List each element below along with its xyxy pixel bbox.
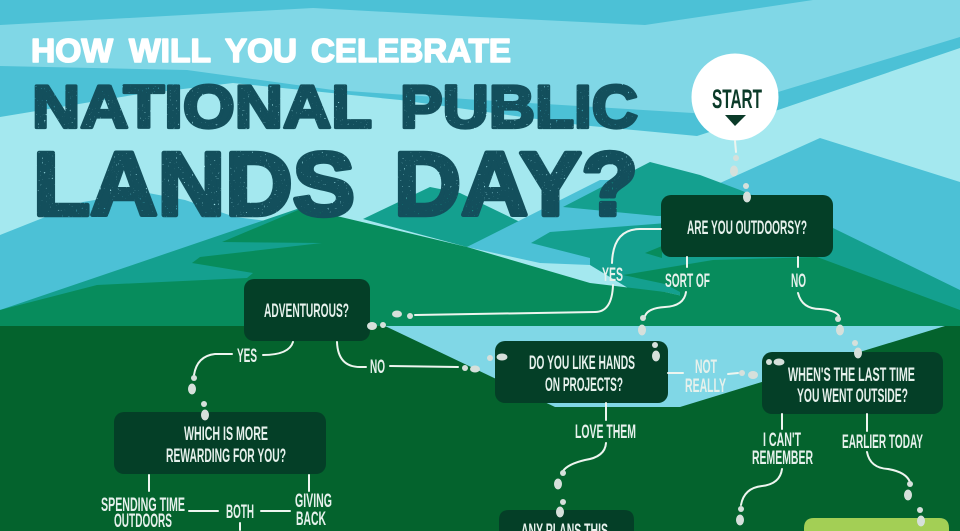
title line: lands day: DAY? — [394, 135, 638, 235]
trail: adventurous yes: YES — [237, 346, 257, 367]
title line: national public: PUBLIC — [400, 74, 638, 140]
trail: adventurous no — [337, 342, 480, 378]
title line: how will you celebrate: YOU — [225, 32, 297, 69]
trail: yes to adventurous — [392, 229, 661, 319]
question: adventurous: ADVENTUROUS? — [264, 301, 349, 322]
title line: national public: NATIONAL — [32, 74, 372, 140]
question: do you like hands on projects: ON PROJECTS? — [545, 375, 623, 396]
title line: lands day — [33, 135, 638, 235]
trail: no — [791, 257, 844, 336]
trail: earlier today — [842, 414, 923, 500]
trail: not really: NOT — [695, 357, 717, 378]
question: are you outdoorsy: ARE YOU OUTDOORSY? — [687, 218, 807, 239]
question: do you like hands on projects: DO YOU LIKE HANDS — [529, 353, 635, 374]
trail: start to first question — [730, 141, 739, 176]
question: adventurous — [244, 279, 370, 341]
trail: no: NO — [791, 271, 806, 292]
title line: how will you celebrate: HOW — [31, 32, 114, 69]
question: which is more rewarding: WHICH IS MORE — [184, 424, 268, 445]
question: do you like hands on projects — [487, 341, 668, 403]
title line: how will you celebrate — [31, 32, 511, 69]
branch: spending time outdoors, both, giving back: BOTH — [226, 502, 254, 523]
trail: i can't remember: I CAN'T — [763, 430, 801, 451]
question: any plans this — [499, 499, 634, 531]
title line: how will you celebrate: WILL — [129, 32, 211, 69]
branch: spending time outdoors, both, giving back — [101, 475, 332, 531]
trail: love them: LOVE THEM — [575, 422, 636, 443]
trail: not really: REALLY — [685, 376, 726, 397]
trail: sort of — [638, 257, 710, 336]
trail: i can't remember: REMEMBER — [752, 448, 813, 469]
question: are you outdoorsy — [661, 183, 833, 257]
branch: spending time outdoors, both, giving back: SPENDING TIME — [101, 495, 185, 516]
question: which is more rewarding: REWARDING FOR YOU? — [166, 446, 286, 467]
trail: i can't remember — [736, 414, 813, 526]
title line: how will you celebrate: CELEBRATE — [311, 32, 511, 69]
prints on adventurous box — [367, 322, 386, 330]
question: which is more rewarding — [114, 401, 326, 474]
title — [31, 32, 638, 235]
answer box: lime — [804, 507, 949, 531]
branch: spending time outdoors, both, giving back: BACK — [296, 509, 326, 530]
trail: sort of: SORT OF — [665, 271, 710, 292]
trail: yes to adventurous: YES — [602, 265, 623, 286]
trail: adventurous yes — [188, 342, 293, 394]
trail: not really — [668, 357, 758, 397]
title line: lands day: LANDS — [33, 135, 355, 235]
trail: adventurous no: NO — [370, 357, 385, 378]
title line: national public — [32, 74, 638, 140]
start badge: START — [712, 84, 762, 114]
branch: spending time outdoors, both, giving back: GIVING — [295, 491, 332, 512]
trail: love them — [554, 403, 636, 490]
start badge — [692, 54, 778, 140]
question: when's the last time — [762, 340, 943, 414]
